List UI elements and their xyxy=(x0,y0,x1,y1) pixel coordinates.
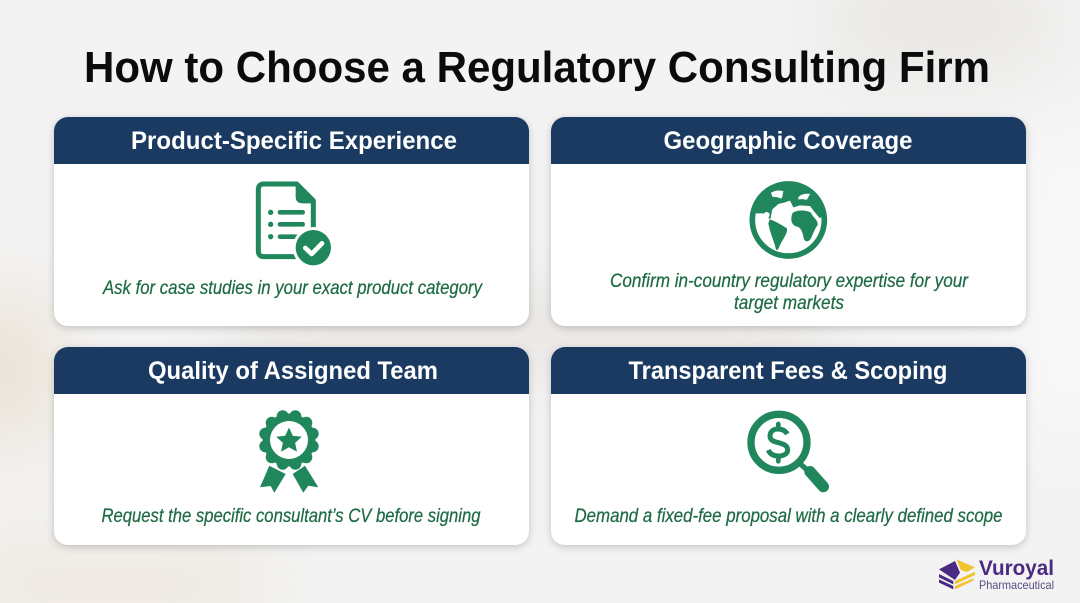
heading: quality of assigned team: Quality of Assigned Team xyxy=(148,357,438,385)
icon: globe xyxy=(752,182,825,256)
description: geographic coverage: Confirm in-country regulatory expertise for your xyxy=(610,271,969,292)
panel: transparent fees and scoping xyxy=(551,347,1026,545)
panel header: transparent fees and scoping xyxy=(551,347,1026,394)
panel: product-specific experience xyxy=(54,117,529,326)
description: geographic coverage: target markets xyxy=(734,293,844,314)
panel header: quality of assigned team xyxy=(54,347,529,394)
brand name: Vuroyal xyxy=(979,557,1054,580)
icon: stacked layers xyxy=(939,559,975,589)
logo: Vuroyal Pharmaceutical xyxy=(939,557,1054,592)
panel header: product-specific experience xyxy=(54,117,529,164)
title: How to Choose a Regulatory Consulting Firm xyxy=(84,43,990,92)
panel: quality of assigned team xyxy=(54,347,529,545)
heading: transparent fees and scoping: Transparent Fees & Scoping xyxy=(628,357,948,385)
heading: product-specific experience: Product-Specific Experience xyxy=(131,127,457,155)
panel: geographic coverage xyxy=(551,117,1026,326)
icon: award ribbon xyxy=(259,410,319,493)
heading: geographic coverage: Geographic Coverage xyxy=(664,127,913,155)
description: transparent fees and scoping: Demand a fixed-fee proposal with a clearly defined scope xyxy=(574,506,1002,527)
brand subtitle: Pharmaceutical xyxy=(979,578,1054,592)
description: quality of assigned team: Request the specific consultant’s CV before signing xyxy=(102,506,481,527)
description: product-specific experience: Ask for case studies in your exact product category xyxy=(102,278,483,299)
panel header: geographic coverage xyxy=(551,117,1026,164)
description: geographic coverage xyxy=(610,271,969,314)
icon: magnifier with dollar xyxy=(751,414,823,487)
icon: document with check xyxy=(258,184,334,268)
